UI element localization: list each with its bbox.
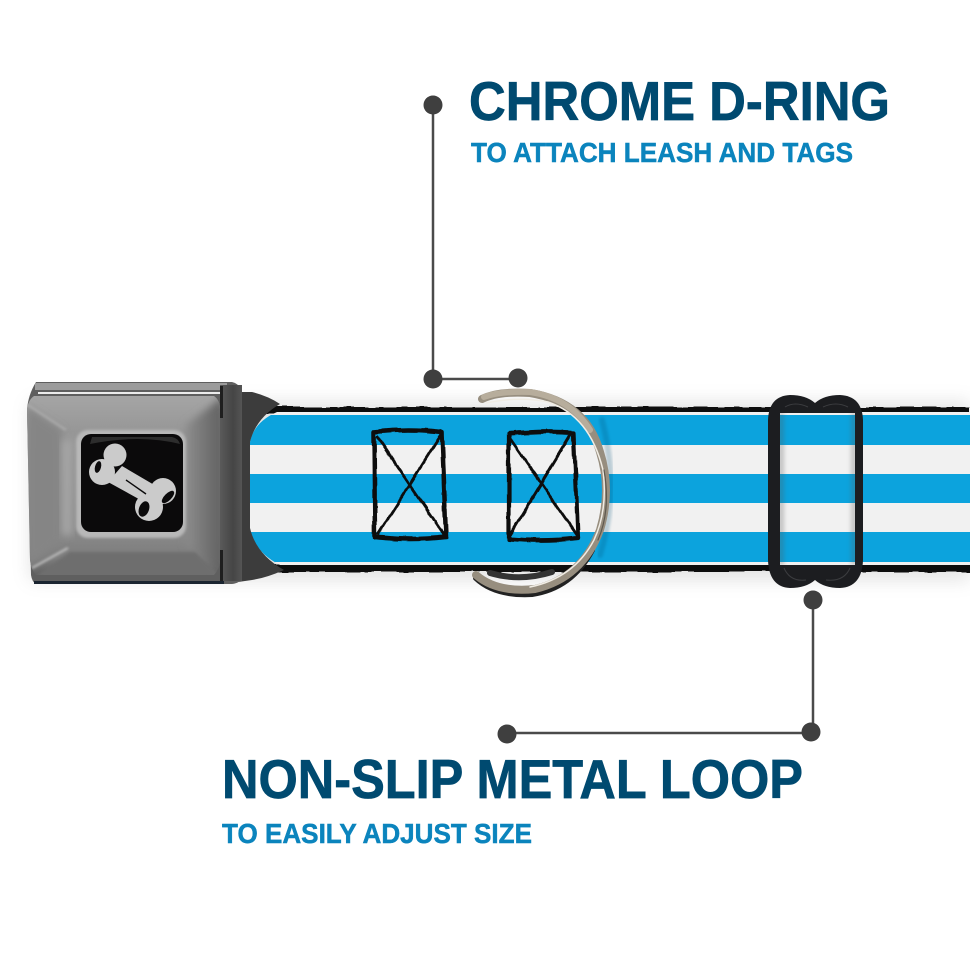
strap stripes bbox=[240, 412, 970, 565]
callout dot: elbow bbox=[424, 370, 442, 388]
ring shadow on strap bbox=[600, 420, 611, 555]
stitched box left bbox=[374, 430, 446, 539]
callout dot: loop bbox=[804, 590, 822, 610]
callout line: d-ring bbox=[424, 96, 528, 388]
strap black bottom edge bbox=[262, 564, 970, 572]
callout line: loop bbox=[498, 590, 822, 744]
callout dot: top bbox=[424, 96, 442, 114]
buckle right band bbox=[220, 385, 242, 581]
seat belt buckle bbox=[25, 382, 242, 584]
chrome d-ring bbox=[476, 392, 611, 594]
stitched box right bbox=[509, 432, 578, 540]
strap black top edge bbox=[262, 407, 970, 414]
infographic bbox=[26, 82, 970, 844]
ring lower back bbox=[476, 550, 592, 594]
callout dot: end bbox=[508, 368, 528, 388]
heading: non-slip metal loop: NON-SLIP METAL LOOP bbox=[222, 748, 803, 810]
subheading: loop: TO EASILY ADJUST SIZE bbox=[222, 818, 532, 849]
icon: bone bbox=[89, 444, 176, 521]
strap shadow bbox=[30, 402, 970, 580]
callout dot: end bbox=[498, 724, 516, 744]
buckle top rim bbox=[27, 382, 242, 584]
buckle body bbox=[25, 394, 224, 578]
logo plate bbox=[76, 430, 186, 538]
buckle tab bbox=[238, 392, 284, 582]
subheading: d-ring: TO ATTACH LEASH AND TAGS bbox=[471, 137, 853, 168]
non-slip metal loop bbox=[768, 395, 863, 588]
collar strap bbox=[240, 407, 970, 572]
heading: chrome d-ring: CHROME D-RING bbox=[469, 70, 890, 132]
callout dot: elbow bbox=[802, 722, 820, 742]
